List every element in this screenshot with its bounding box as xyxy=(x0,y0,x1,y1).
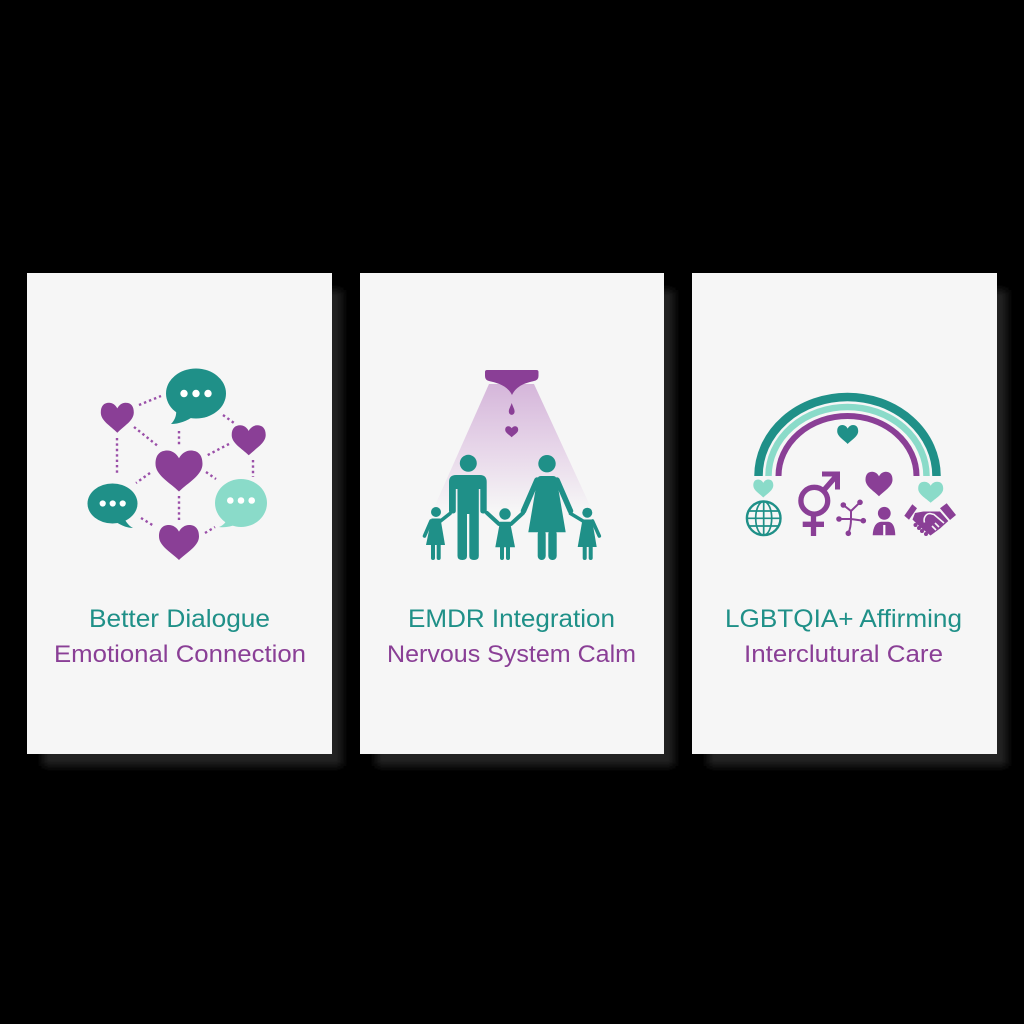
light cone xyxy=(433,384,592,510)
figure: left child xyxy=(424,507,450,560)
network diagram of hearts and speech bubbles xyxy=(88,368,267,560)
panel: emdr integration xyxy=(360,273,674,766)
icon: network molecule xyxy=(836,500,866,536)
icon: drop xyxy=(509,403,515,415)
icon: purple heart xyxy=(866,472,892,496)
text: intercultural care: Interclutural Care xyxy=(744,641,943,668)
icon: teal heart xyxy=(837,425,858,444)
figure: mother xyxy=(524,455,570,560)
icon: right mint heart xyxy=(918,482,943,503)
heading: emdr integration: EMDR Integration xyxy=(408,605,615,633)
icon: handshake xyxy=(904,503,956,536)
icon: centre heart xyxy=(156,450,202,492)
rainbow arcs xyxy=(758,397,937,476)
figure: father xyxy=(449,455,487,560)
icon: bottom heart xyxy=(159,525,199,560)
icon: ceiling lamp xyxy=(485,370,538,395)
text: nervous system calm: Nervous System Calm xyxy=(387,641,636,668)
icon: right heart xyxy=(232,425,266,455)
text: emotional connection: Emotional Connection xyxy=(54,641,306,668)
icon: small heart xyxy=(505,426,518,437)
icon: top speech bubble xyxy=(166,368,226,424)
family silhouette xyxy=(424,455,599,560)
icon: upper left heart xyxy=(101,403,134,433)
figure: centre child xyxy=(487,508,523,560)
icon: right speech bubble xyxy=(215,479,267,527)
heading: better dialogue: Better Dialogue xyxy=(89,605,270,633)
panel: better dialogue xyxy=(27,273,342,766)
icon: gender symbol xyxy=(801,474,838,536)
figure: right child xyxy=(570,508,599,560)
icon: globe xyxy=(747,502,780,535)
icon: left mint heart xyxy=(753,480,773,498)
icon: person xyxy=(873,507,895,535)
heading: lgbtqia affirming: LGBTQIA+ Affirming xyxy=(725,605,962,633)
panel: lgbtqia affirming xyxy=(692,273,1007,766)
icon: left speech bubble xyxy=(88,484,138,528)
